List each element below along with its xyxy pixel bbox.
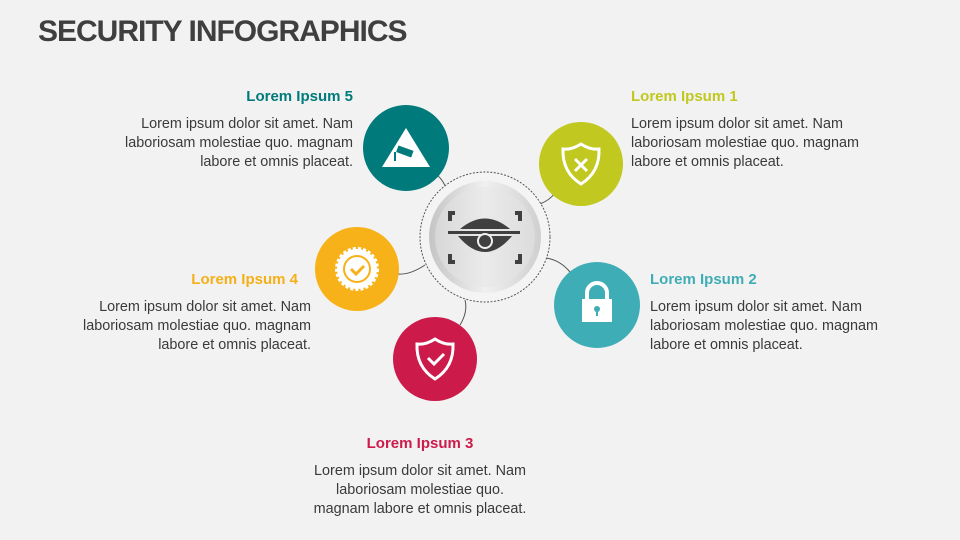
text 3: laboriosam molestiae quo. xyxy=(336,482,504,498)
text 3: Lorem ipsum dolor sit amet. Nam xyxy=(314,463,526,479)
text 1: labore et omnis placeat. xyxy=(631,154,784,170)
text 4: Lorem ipsum dolor sit amet. Nam xyxy=(99,299,311,315)
icon: badge check xyxy=(337,249,377,289)
text 2: labore et omnis placeat. xyxy=(650,337,803,353)
text 5 xyxy=(125,116,353,170)
heading 3: Lorem Ipsum 3 xyxy=(367,435,473,452)
text 5: laboriosam molestiae quo. magnam xyxy=(125,135,353,151)
heading 4: Lorem Ipsum 4 xyxy=(191,271,298,288)
icon: padlock xyxy=(587,283,607,300)
text 5: labore et omnis placeat. xyxy=(200,154,353,170)
text 2 xyxy=(650,299,878,353)
text 4: laboriosam molestiae quo. magnam xyxy=(83,318,311,334)
circle 4 xyxy=(315,227,399,311)
text 1: Lorem ipsum dolor sit amet. Nam xyxy=(631,116,843,132)
text 5: Lorem ipsum dolor sit amet. Nam xyxy=(141,116,353,132)
text 3: magnam labore et omnis placeat. xyxy=(314,501,526,517)
heading 2: Lorem Ipsum 2 xyxy=(650,271,757,288)
heading 5: Lorem Ipsum 5 xyxy=(246,88,353,105)
connectors xyxy=(398,175,570,325)
icon: shield x xyxy=(563,144,599,184)
text 2: laboriosam molestiae quo. magnam xyxy=(650,318,878,334)
text 4 xyxy=(83,299,311,353)
text 1: laboriosam molestiae quo. magnam xyxy=(631,135,859,151)
title: SECURITY INFOGRAPHICS xyxy=(38,15,406,48)
circle 2 xyxy=(554,262,640,348)
text 4: labore et omnis placeat. xyxy=(158,337,311,353)
circle 5 xyxy=(363,105,449,191)
circle 1 xyxy=(539,122,623,206)
icon: camera warning xyxy=(382,128,430,167)
icon: shield check xyxy=(417,339,453,379)
heading 1: Lorem Ipsum 1 xyxy=(631,88,738,105)
text 1 xyxy=(631,116,859,170)
icon: eye scan xyxy=(448,211,522,264)
text 2: Lorem ipsum dolor sit amet. Nam xyxy=(650,299,862,315)
center circle xyxy=(420,172,550,302)
text 3 xyxy=(314,463,526,517)
circle 3 xyxy=(393,317,477,401)
